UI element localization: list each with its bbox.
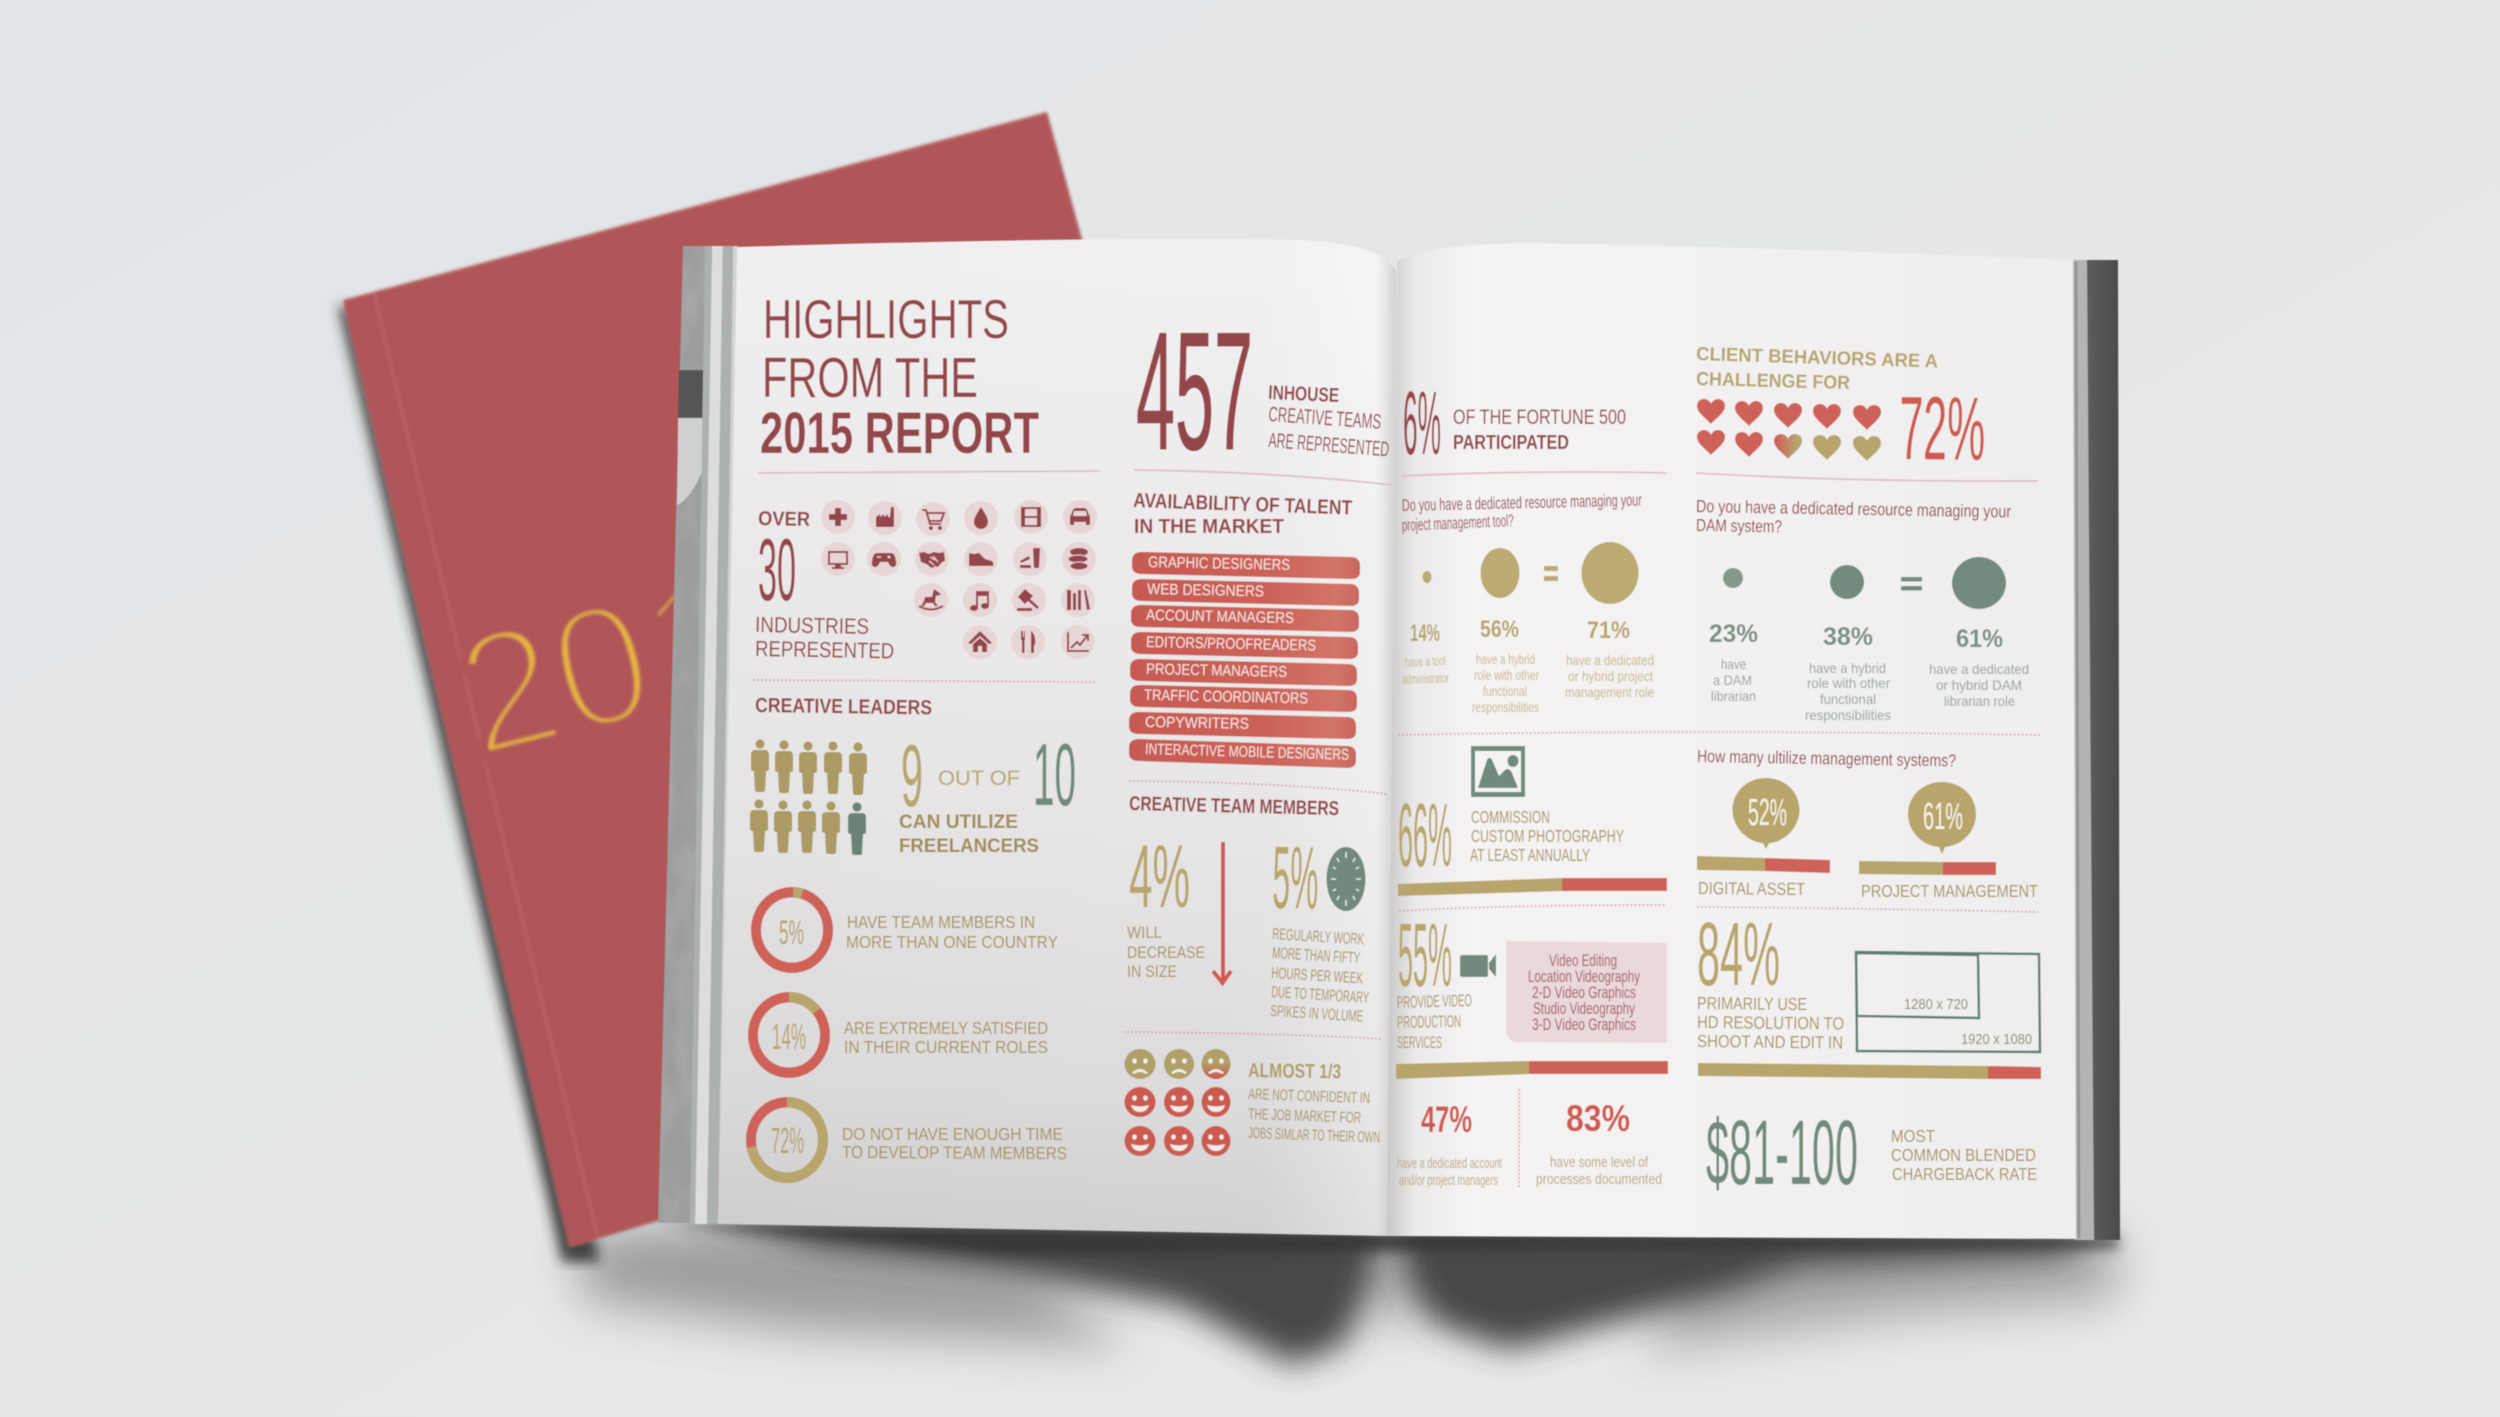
progress bar 55	[1396, 1061, 1668, 1079]
video services box	[1506, 941, 1667, 1043]
gold circle captions: have a hybrid	[1476, 652, 1535, 667]
bar: traffic coordinators: TRAFFIC COORDINATORS	[1144, 687, 1308, 707]
stat: almost one third: ARE NOT CONFIDENT IN	[1248, 1086, 1370, 1107]
hearts pictogram	[1697, 399, 1881, 461]
right page content: 55%	[1398, 906, 1452, 1006]
stat: 66 percent: 66%	[1398, 786, 1452, 886]
gold circle captions: responsibilities	[1472, 700, 1539, 715]
left stack textured edge	[658, 246, 706, 1223]
stat: 4 percent decrease: DECREASE	[1127, 944, 1205, 962]
progress bar digital asset	[1697, 856, 1830, 873]
green circle captions	[1711, 656, 2029, 723]
creative leaders heading: CREATIVE LEADERS	[755, 694, 932, 719]
gold percent stats	[1410, 616, 1630, 647]
industries heading	[755, 508, 894, 663]
icon: coin stack	[1062, 542, 1096, 576]
stat: 55 percent	[1397, 906, 1472, 1052]
cover shadow	[338, 305, 600, 1262]
stat: 5 percent overtime	[1270, 827, 1370, 1026]
stat: chargeback rate: COMMON BLENDED	[1891, 1145, 2036, 1165]
icon: monitor	[821, 542, 855, 576]
right page	[1387, 243, 2076, 1239]
green circle captions: functional	[1820, 691, 1876, 707]
stat: 84 percent: PRIMARILY USE	[1697, 993, 1807, 1014]
icon: game controller	[867, 542, 901, 576]
nine out of ten stat	[899, 725, 1076, 857]
nine out of ten stat: FREELANCERS	[899, 836, 1039, 857]
gold percent stats: 56%	[1480, 616, 1519, 643]
green circle captions: or hybrid DAM	[1936, 677, 2022, 693]
green circle captions: role with other	[1807, 675, 1890, 691]
stat: 4 percent decrease	[1127, 826, 1205, 981]
question: DAM system	[1696, 496, 2011, 537]
stat: 55 percent: SERVICES	[1397, 1033, 1442, 1052]
back cover book	[338, 112, 1085, 1262]
stat: chargeback rate: CHARGEBACK RATE	[1892, 1164, 2037, 1184]
progress bar 66	[1398, 878, 1667, 896]
gold sad faces	[1124, 1049, 1194, 1079]
title: FROM THE	[762, 346, 978, 410]
green circle captions: have a dedicated	[1929, 661, 2029, 677]
nine out of ten stat: CAN UTILIZE	[899, 812, 1018, 833]
bar: account managers: ACCOUNT MANAGERS	[1146, 607, 1294, 627]
stat: 84 percent	[1697, 905, 1844, 1053]
availability heading: IN THE MARKET	[1134, 515, 1284, 538]
client behaviors heading: CLIENT BEHAVIORS ARE A	[1696, 344, 1939, 373]
stat: almost one third: JOBS SIMLAR TO THEIR OWN	[1248, 1125, 1380, 1147]
video services box: Studio Videography	[1533, 1000, 1636, 1018]
icon: fork and knife	[1011, 625, 1045, 659]
icon: rocking horse	[914, 583, 948, 617]
stat: 5 percent overtime: DUE TO TEMPORARY	[1271, 984, 1370, 1007]
red cover	[343, 112, 1085, 1247]
stat: 55 percent: PROVIDE VIDEO	[1397, 991, 1472, 1012]
question: DAM system: Do you have a dedicated resource managing your	[1696, 496, 2011, 521]
stat: 83 percent: processes documented	[1536, 1171, 1662, 1188]
icon: factory	[868, 501, 902, 535]
proportional circles: green	[1723, 557, 2006, 609]
right page content	[1396, 344, 2041, 1204]
project management label: PROJECT MANAGEMENT	[1861, 881, 2038, 901]
progress bar 84	[1698, 1063, 2041, 1079]
industries heading: 30	[758, 520, 796, 619]
client behaviors heading: CHALLENGE FOR	[1696, 369, 1851, 394]
gold hearts	[1813, 435, 1881, 461]
stat: fortune 500: PARTICIPATED	[1453, 432, 1569, 454]
icon: handshake	[915, 542, 949, 576]
right stack of pages	[2071, 260, 2094, 1240]
resolution diagram: 1280 x 720	[1904, 997, 1968, 1013]
icon: shopping cart	[916, 502, 950, 536]
stat: 457 teams: CREATIVE TEAMS	[1268, 403, 1382, 434]
digital asset label: DIGITAL ASSET	[1698, 878, 1805, 899]
faces pictogram	[1124, 1049, 1230, 1156]
left page curl highlight	[719, 239, 1396, 1236]
icon: photo frame	[1471, 746, 1525, 797]
availability heading: AVAILABILITY OF TALENT	[1133, 489, 1353, 520]
stat: 83 percent: 83%	[1566, 1098, 1630, 1139]
question: DAM system: DAM system?	[1696, 515, 1782, 537]
industry icons	[821, 500, 1097, 659]
creative team members heading: CREATIVE TEAM MEMBERS	[1129, 793, 1339, 820]
stat: 457 teams: ARE REPRESENTED	[1268, 429, 1390, 461]
cover spine fold	[374, 293, 598, 1239]
gold percent stats: 14%	[1410, 620, 1440, 647]
resolution diagram	[1856, 952, 2040, 1052]
right page content: 72%	[1899, 379, 1986, 480]
donut 72 percent: TO DEVELOP TEAM MEMBERS	[842, 1142, 1067, 1163]
icon: growth chart	[1061, 625, 1095, 659]
donut 5 percent: HAVE TEAM MEMBERS IN	[847, 912, 1035, 932]
gold circle captions: management role	[1565, 685, 1654, 700]
video services box: Location Videography	[1528, 968, 1641, 986]
people pictogram 9 of 10	[750, 739, 867, 855]
donut 5 percent: 5%	[779, 914, 804, 952]
stat: 66 percent: COMMISSION	[1471, 807, 1550, 827]
stat: 5 percent overtime: MORE THAN FIFTY	[1272, 945, 1361, 967]
gold person row one	[751, 739, 867, 795]
donut 14 percent: IN THEIR CURRENT ROLES	[844, 1037, 1048, 1057]
bar: graphic designers: GRAPHIC DESIGNERS	[1148, 554, 1290, 574]
bar: graphic designers	[1132, 552, 1360, 579]
right stack inner line	[2076, 262, 2079, 1238]
left page layers	[690, 246, 712, 1223]
stat: chargeback rate: MOST	[1891, 1126, 1935, 1146]
icon: shoe	[964, 542, 998, 576]
stat: fortune 500: 6%	[1403, 374, 1441, 474]
title	[760, 288, 1039, 466]
green circle captions: a DAM	[1713, 672, 1752, 688]
stat: almost one third: ALMOST 1/3	[1248, 1060, 1341, 1083]
gold circle captions: role with other	[1474, 668, 1539, 683]
donut 14 percent: ARE EXTREMELY SATISFIED	[844, 1018, 1048, 1038]
pin: digital asset: 52%	[1748, 792, 1787, 834]
industries heading: REPRESENTED	[755, 636, 894, 663]
green percent stats: 38%	[1823, 623, 1873, 651]
gold circle captions: administrator	[1402, 670, 1449, 687]
donut 14 percent: 14%	[772, 1016, 806, 1057]
open book	[658, 239, 2120, 1240]
video services box: Video Editing	[1549, 952, 1617, 970]
bar: copywriters: COPYWRITERS	[1145, 714, 1249, 733]
pin: project management: 61%	[1923, 796, 1963, 838]
donut 5 percent: MORE THAN ONE COUNTRY	[846, 932, 1058, 952]
bar: editors and proofreaders: EDITORS/PROOFREADERS	[1146, 634, 1316, 655]
progress bar project management	[1859, 861, 1996, 875]
gold percent stats: 71%	[1587, 617, 1630, 644]
green circle captions: librarian role	[1944, 693, 2015, 709]
stat: 84 percent: SHOOT AND EDIT IN	[1697, 1031, 1843, 1053]
question: management systems: How many ultilize management systems?	[1697, 746, 1956, 771]
gold circle captions: functional	[1483, 684, 1527, 699]
left page	[719, 239, 1396, 1236]
cover year text: 2015	[441, 516, 854, 794]
bar: interactive mobile designers	[1129, 739, 1356, 768]
industries heading: INDUSTRIES	[755, 612, 869, 639]
bar: web designers: WEB DESIGNERS	[1147, 581, 1264, 600]
donut 5 percent	[755, 891, 1058, 969]
bar: traffic coordinators	[1130, 685, 1357, 712]
icon: books	[1061, 583, 1095, 617]
book right edge dark cover	[2085, 260, 2120, 1240]
stat: 84 percent: HD RESOLUTION TO	[1697, 1012, 1844, 1034]
title: HIGHLIGHTS	[763, 288, 1009, 350]
stat: 83 percent: have some level of	[1550, 1154, 1649, 1171]
video services box: 3-D Video Graphics	[1532, 1016, 1636, 1034]
stat: 5 percent overtime: SPIKES IN VOLUME	[1270, 1003, 1364, 1026]
green circle captions: librarian	[1711, 688, 1756, 704]
ground shadow under book	[575, 1215, 2120, 1365]
bar: project managers: PROJECT MANAGERS	[1146, 661, 1287, 681]
pin: digital asset	[1732, 778, 1800, 849]
mixed sad face	[1202, 1049, 1230, 1079]
bar: project managers	[1130, 659, 1357, 686]
stat: 4 percent decrease: 4%	[1129, 826, 1190, 926]
resolution diagram: 1920 x 1080	[1961, 1032, 2032, 1048]
stat: 4 percent decrease: WILL	[1127, 924, 1162, 942]
green percent stats	[1709, 620, 2003, 653]
stat: 457 teams: INHOUSE	[1268, 382, 1340, 407]
stat: 47 percent	[1397, 1099, 1503, 1189]
donut 72 percent	[751, 1102, 1067, 1178]
arrow: decrease	[1213, 842, 1231, 983]
availability heading	[1133, 489, 1353, 538]
icon: lotion bottle	[1013, 542, 1047, 576]
stat: 66 percent: CUSTOM PHOTOGRAPHY	[1471, 826, 1624, 846]
stat: fortune 500	[1403, 374, 1626, 474]
video services box: 2-D Video Graphics	[1532, 984, 1636, 1002]
question: project management	[1401, 491, 1642, 535]
gold circle captions: or hybrid project	[1568, 669, 1653, 684]
bar: copywriters	[1129, 712, 1356, 739]
pin: project management	[1908, 782, 1976, 854]
gold circle captions: have a tool	[1404, 653, 1446, 670]
donut 72 percent: 72%	[771, 1120, 804, 1161]
donut 72 percent: DO NOT HAVE ENOUGH TIME	[842, 1124, 1063, 1144]
left page content: 10	[1033, 725, 1076, 824]
stat: 5 percent overtime: REGULARLY WORK	[1272, 926, 1365, 949]
stat: 47 percent: 47%	[1421, 1099, 1472, 1140]
stat: 47 percent: have a dedicated account	[1397, 1155, 1503, 1172]
gold circle captions: have a dedicated	[1566, 653, 1654, 668]
green percent stats: 23%	[1709, 620, 1758, 648]
icon: film	[1014, 500, 1048, 534]
icon: house	[963, 625, 997, 659]
icon: water drop	[964, 501, 998, 535]
industries heading: OVER	[758, 508, 811, 531]
stat: chargeback rate: $81-100	[1706, 1102, 1858, 1204]
stat: 5 percent overtime: 5%	[1272, 827, 1319, 928]
icon: car	[1063, 500, 1097, 534]
bar: web designers	[1132, 579, 1359, 606]
title: 2015 REPORT	[760, 401, 1039, 466]
stat: fortune 500: OF THE FORTUNE 500	[1453, 406, 1626, 429]
left page content	[750, 288, 1392, 1178]
icon: medical cross	[821, 500, 855, 534]
green circle captions: have	[1721, 656, 1746, 672]
half red heart	[1774, 434, 1802, 459]
red smiling faces	[1124, 1087, 1230, 1156]
stat: 457 teams: 457	[1136, 297, 1253, 485]
green person	[848, 802, 866, 855]
client behaviors heading	[1696, 344, 1939, 394]
availability bars	[1129, 552, 1360, 768]
green circle captions: have a hybrid	[1809, 660, 1886, 676]
stat: 4 percent decrease: IN SIZE	[1127, 963, 1177, 981]
stat: 66 percent: AT LEAST ANNUALLY	[1470, 845, 1590, 865]
green percent stats: 61%	[1956, 625, 2003, 653]
gold circle captions	[1402, 652, 1654, 715]
bar: account managers	[1131, 605, 1359, 632]
gold person row two	[750, 799, 840, 854]
bar: interactive mobile designers: INTERACTIVE MOBILE DESIGNERS	[1145, 741, 1349, 764]
icon: clock	[1326, 847, 1366, 911]
green circle captions: responsibilities	[1805, 707, 1891, 723]
stat: 84 percent: 84%	[1697, 905, 1780, 1005]
stat: almost one third	[1248, 1060, 1380, 1147]
stat: 83 percent	[1536, 1098, 1662, 1188]
question: project management: Do you have a dedicated resource managing your	[1402, 491, 1642, 515]
icon: video camera	[1460, 954, 1496, 977]
icon: gavel	[1012, 583, 1046, 617]
nine out of ten stat: OUT OF	[938, 767, 1020, 790]
icon: music note	[963, 583, 997, 617]
proportional circles: gold	[1422, 542, 1638, 604]
red hearts	[1697, 399, 1881, 457]
question: project management: project management tool?	[1401, 511, 1514, 535]
donut 14 percent	[753, 997, 1048, 1073]
stat: almost one third: THE JOB MARKET FOR	[1248, 1106, 1361, 1127]
stat: 55 percent: PRODUCTION	[1397, 1012, 1461, 1032]
nine out of ten stat: 9	[901, 726, 923, 825]
stat: 5 percent overtime: HOURS PER WEEK	[1271, 965, 1364, 988]
stat: 47 percent: and/or project managers	[1399, 1172, 1498, 1189]
